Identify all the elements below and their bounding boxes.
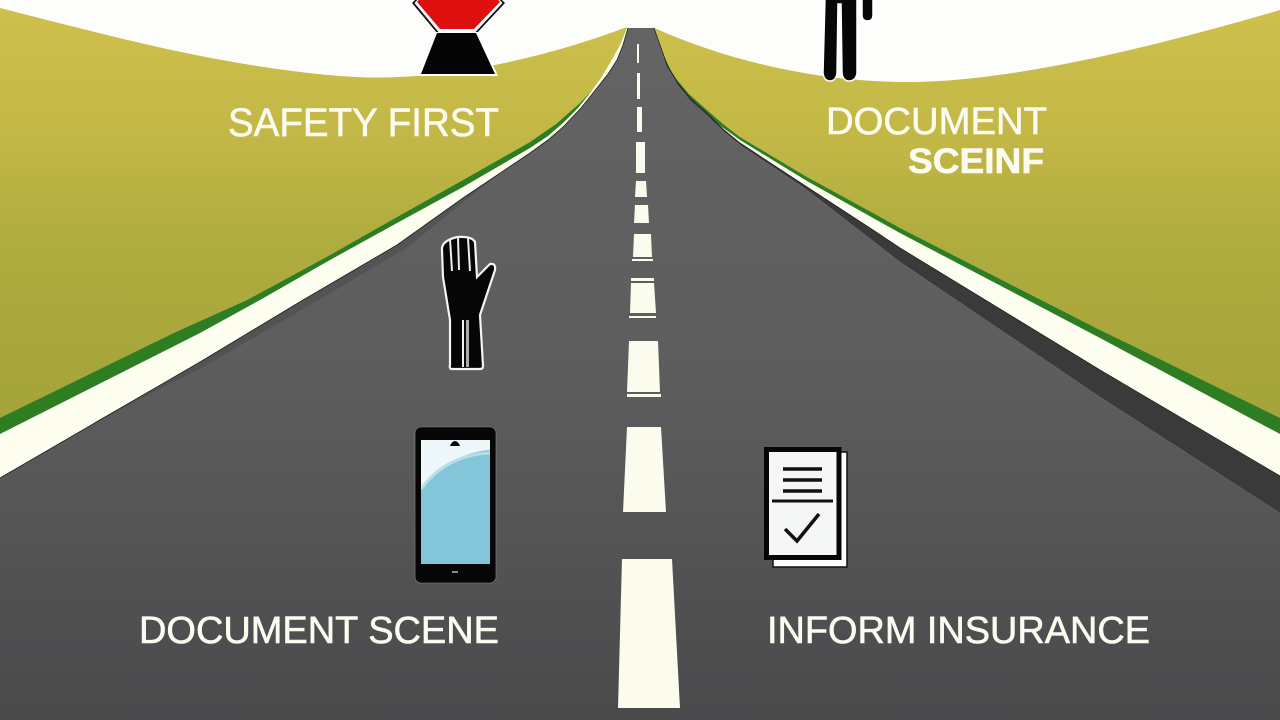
phone notch	[450, 441, 460, 446]
icon: smartphone	[415, 427, 496, 583]
left white road edge	[0, 28, 628, 478]
stop sign base	[418, 32, 498, 76]
left grass field	[0, 8, 627, 420]
subheading: garbled scene: SCEINF	[908, 142, 1044, 181]
screen highlight	[421, 440, 490, 490]
heading: document: DOCUMENT	[826, 101, 1047, 143]
heading: document scene: DOCUMENT SCENE	[139, 610, 499, 652]
screen arc	[422, 453, 490, 488]
left road shadow	[90, 173, 500, 425]
icon: stop sign	[412, 0, 505, 76]
document divider	[772, 500, 833, 502]
right grass field	[652, 10, 1280, 420]
icon: glove	[442, 237, 495, 369]
right green verge	[652, 27, 1280, 437]
left green verge	[0, 28, 628, 437]
phone screen	[421, 440, 490, 564]
right road shoulder	[654, 28, 1280, 513]
right white road edge	[652, 27, 1280, 476]
glove finger lines	[450, 237, 470, 367]
document text lines	[783, 469, 822, 491]
right road edge line	[654, 28, 1280, 476]
glove wrist band	[466, 320, 469, 367]
icon: person standing	[823, 0, 873, 81]
checkmark	[785, 514, 819, 541]
centre dashes	[618, 44, 680, 708]
heading: inform insurance: INFORM INSURANCE	[767, 610, 1150, 652]
home button	[452, 571, 458, 573]
left road edge line	[0, 28, 628, 478]
stop sign octagon	[412, 0, 505, 33]
heading: safety first: SAFETY FIRST	[228, 101, 499, 145]
back page	[773, 452, 847, 567]
icon: insurance document	[766, 450, 847, 567]
front page	[766, 450, 839, 558]
